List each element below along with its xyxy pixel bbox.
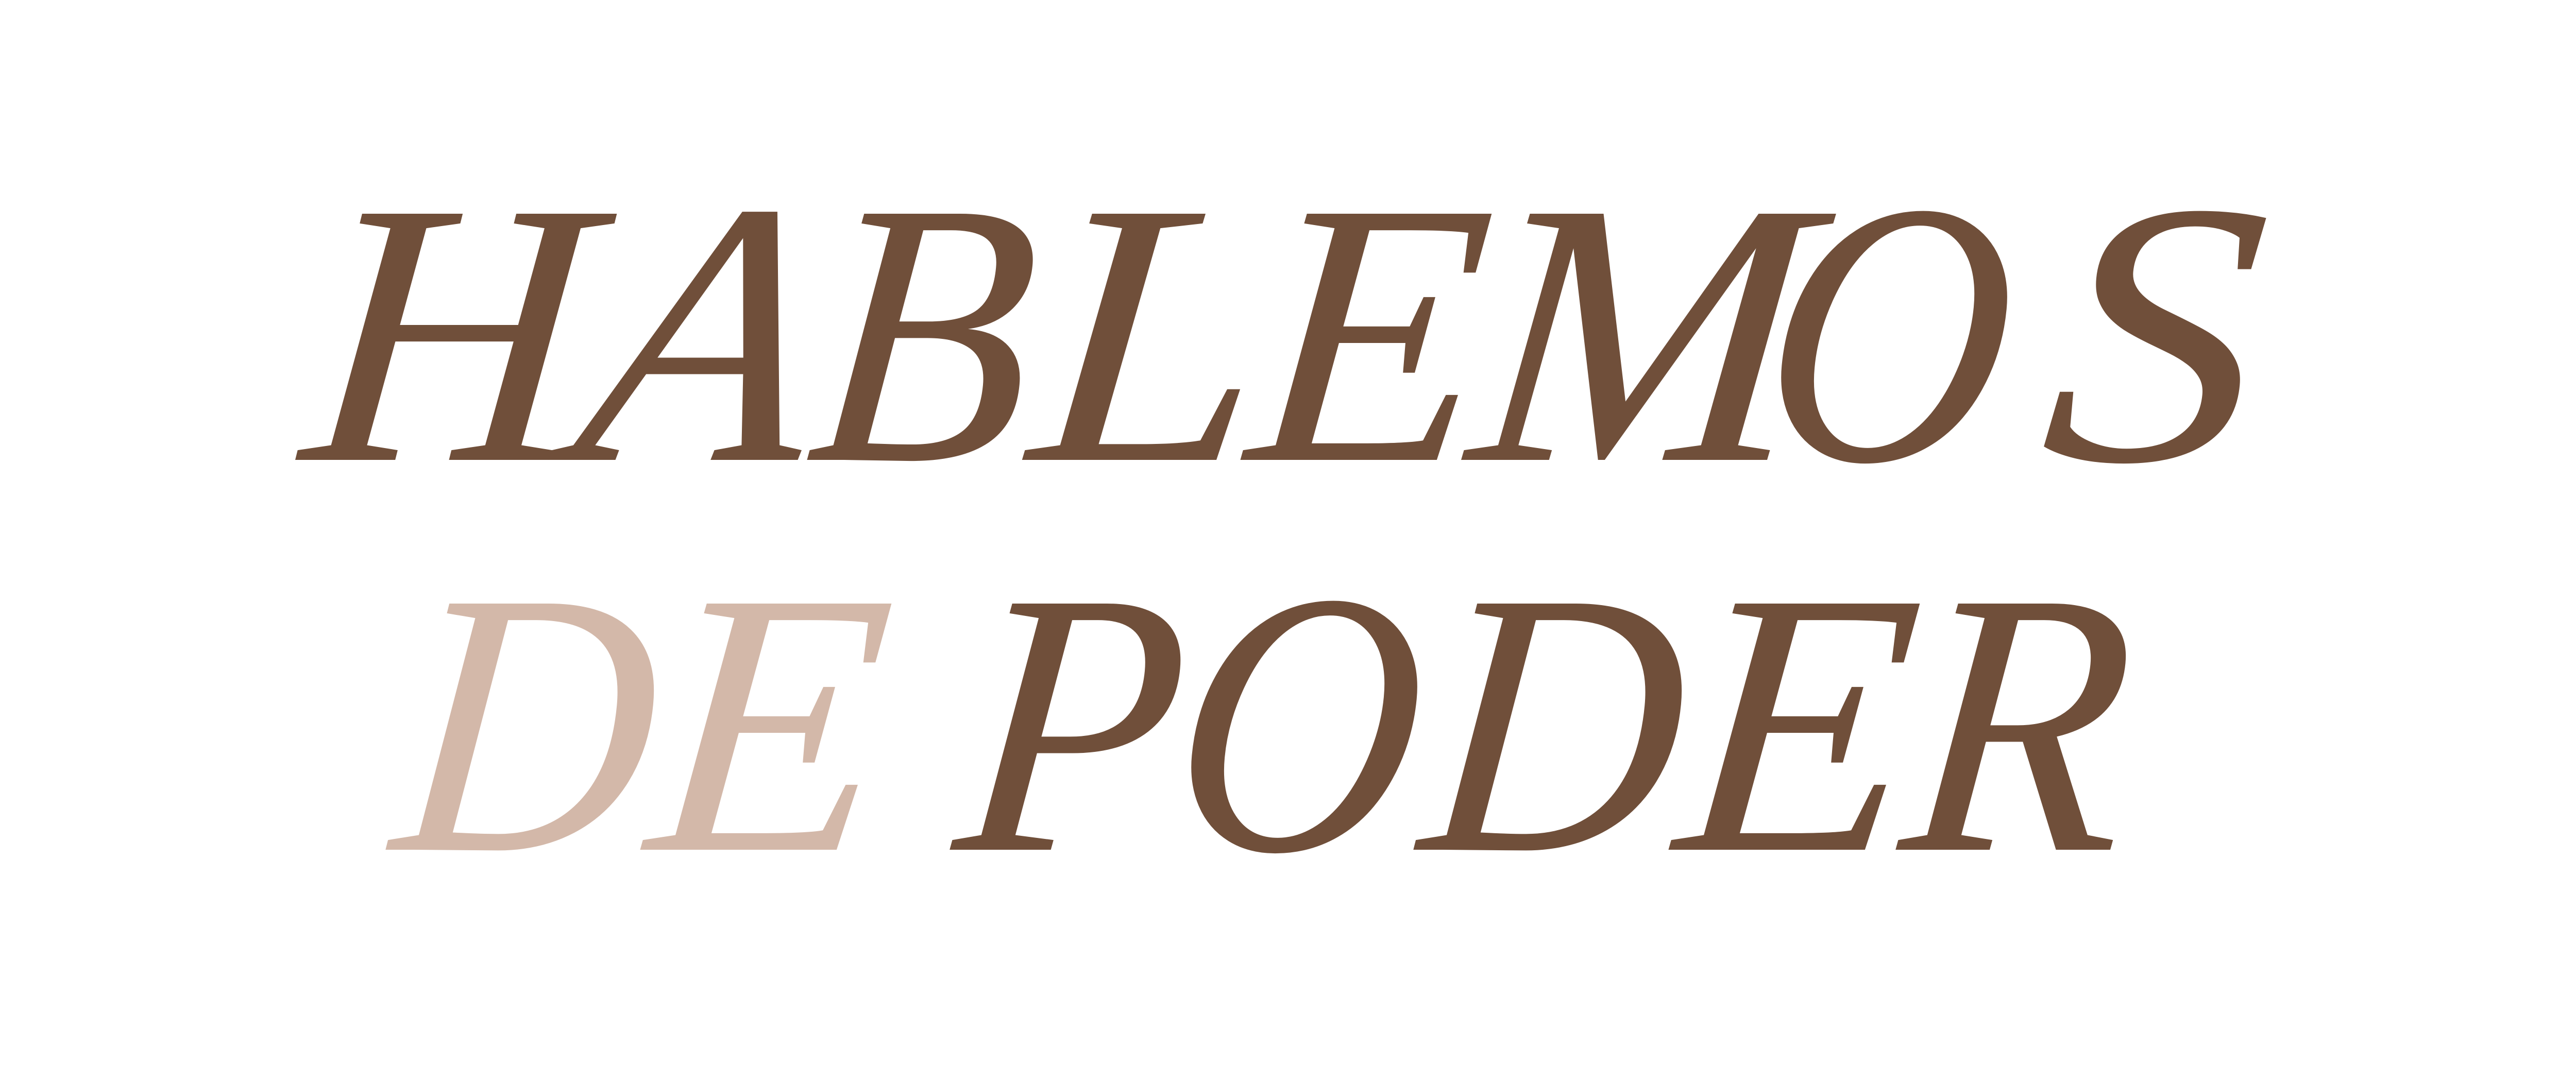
heading line 2: DE PODER: O — [1158, 514, 1442, 931]
heading line 1: HABLEMOS — [292, 125, 2282, 541]
heading line 1: HABLEMOS: S — [2030, 125, 2282, 541]
heading line 2: DE PODER — [382, 514, 2150, 931]
heading line 1: HABLEMOS: E — [1237, 125, 1506, 541]
heading line 1: HABLEMOS: B — [796, 125, 1054, 541]
heading line 1: HABLEMOS: H — [292, 125, 608, 541]
heading line 1: HABLEMOS: M — [1458, 125, 1826, 541]
heading line 2: DE PODER: P — [944, 514, 1204, 931]
heading line 2: DE PODER: D — [382, 514, 676, 931]
heading line 2: DE PODER: E — [637, 514, 906, 931]
heading line 2: DE PODER: D — [1410, 514, 1704, 931]
heading line 2: DE PODER: R — [1890, 514, 2150, 931]
heading line 1: HABLEMOS: L — [1019, 125, 1284, 541]
heading line 1: HABLEMOS: A — [553, 125, 861, 541]
heading line 2: DE PODER: E — [1665, 514, 1934, 931]
heading line 1: HABLEMOS: O — [1748, 125, 2032, 541]
